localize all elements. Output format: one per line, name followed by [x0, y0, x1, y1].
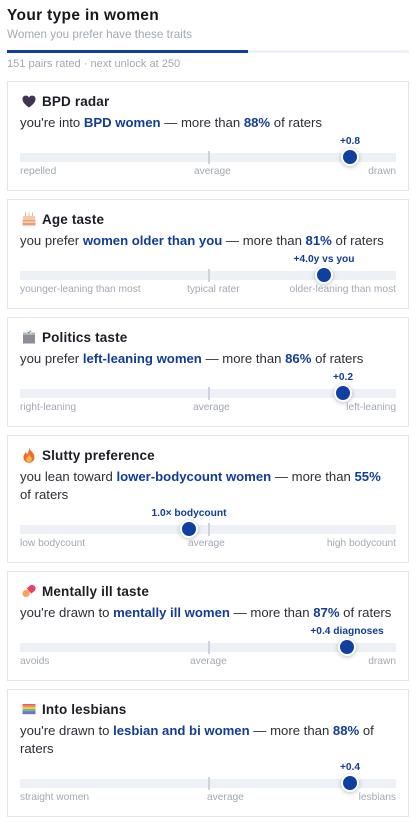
- icon: ballot box: [23, 330, 35, 344]
- label right: left-leaning: [346, 402, 396, 413]
- sentence continuation: of raters: [20, 487, 68, 502]
- heading: Into lesbians: Into lesbians: [42, 702, 126, 717]
- panel: BPD radar: [7, 81, 409, 191]
- slider tick: [208, 151, 210, 164]
- slider thumb: [180, 520, 198, 538]
- slider tick: [208, 387, 210, 400]
- value label: +4.0y vs you: [294, 254, 354, 265]
- slider track: [20, 525, 396, 534]
- subtitle: Women you prefer have these traits: [7, 28, 192, 41]
- icon: birthday cake: [22, 212, 36, 226]
- panel: Into lesbians: [7, 689, 409, 817]
- slider thumb: [334, 384, 352, 402]
- value label: 1.0× bodycount: [151, 508, 227, 519]
- heading: Mentally ill taste: Mentally ill taste: [42, 584, 149, 599]
- slider track: [20, 271, 396, 280]
- slider tick: [208, 641, 210, 654]
- label right: drawn: [368, 166, 396, 177]
- sentence: Politics taste: you prefer left-leaning women — more than 86% of raters: [20, 351, 363, 366]
- icon: pill: [22, 584, 36, 598]
- slider track: [20, 389, 396, 398]
- label middle: average: [190, 656, 227, 667]
- slider track: [20, 779, 396, 788]
- slider tick: [208, 777, 210, 790]
- value label: +0.2: [333, 372, 353, 383]
- slider thumb: [338, 638, 356, 656]
- label left: straight women: [20, 792, 89, 803]
- heading: Politics taste: Politics taste: [42, 330, 127, 345]
- value label: +0.4 diagnoses: [310, 626, 384, 637]
- icon: black heart: [22, 96, 36, 108]
- label right: high bodycount: [327, 538, 396, 549]
- label middle: typical rater: [187, 284, 240, 295]
- slider track: [20, 153, 396, 162]
- slider thumb: [314, 266, 332, 284]
- panel: Mentally ill taste: [7, 571, 409, 681]
- label middle: average: [207, 792, 244, 803]
- label left: avoids: [20, 656, 49, 667]
- sentence: Mentally ill taste: you're drawn to mentally ill women — more than 87% of raters: [20, 605, 391, 620]
- label middle: average: [188, 538, 225, 549]
- slider tick: [208, 269, 210, 282]
- panel: Politics taste: [7, 317, 409, 427]
- sentence: Age taste: you prefer women older than you — more than 81% of raters: [20, 233, 384, 248]
- sentence: BPD radar: you're into BPD women — more than 88% of raters: [20, 115, 322, 130]
- slider thumb: [340, 148, 358, 166]
- sentence: Slutty preference: you lean toward lower-bodycount women — more than 55%: [20, 469, 381, 484]
- value label: +0.4: [340, 762, 360, 773]
- label right: lesbians: [359, 792, 396, 803]
- icon: fire: [24, 448, 34, 463]
- label left: low bodycount: [20, 538, 85, 549]
- sentence: Into lesbians: you're drawn to lesbian and bi women — more than 88% of: [20, 723, 374, 738]
- value label: +0.8: [340, 136, 360, 147]
- label left: right-leaning: [20, 402, 76, 413]
- sentence continuation: raters: [20, 741, 54, 756]
- heading: Slutty preference: Slutty preference: [42, 448, 155, 463]
- label middle: average: [194, 166, 231, 177]
- title: Your type in women: [7, 7, 159, 24]
- slider thumb: [340, 774, 358, 792]
- label right: older-leaning than most: [290, 284, 396, 295]
- slider tick: [208, 523, 210, 536]
- progress bar: [7, 50, 409, 53]
- slider track: [20, 643, 396, 652]
- label middle: average: [193, 402, 230, 413]
- label left: younger-leaning than most: [20, 284, 141, 295]
- heading: BPD radar: BPD radar: [42, 94, 109, 109]
- icon: rainbow flag: [22, 704, 36, 714]
- label left: repelled: [20, 166, 56, 177]
- heading: Age taste: Age taste: [42, 212, 104, 227]
- panel: Age taste: [7, 199, 409, 309]
- panel: Slutty preference: [7, 435, 409, 563]
- label right: drawn: [368, 656, 396, 667]
- progress caption: 151 pairs rated · next unlock at 250: [7, 58, 180, 70]
